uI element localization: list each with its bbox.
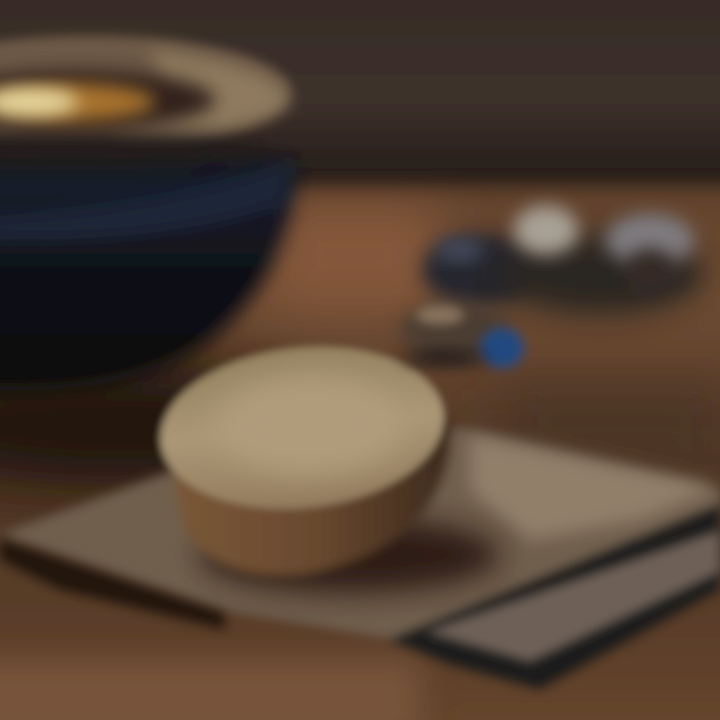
napkin bbox=[0, 428, 720, 640]
bowl body bbox=[0, 130, 296, 391]
bowl shadow on table bbox=[0, 365, 360, 485]
cake shadow bbox=[200, 517, 500, 593]
bowl blue highlight band bbox=[0, 160, 292, 241]
napkin shadow edge bbox=[0, 538, 225, 630]
dark slate mat bbox=[390, 505, 720, 690]
wall background bbox=[0, 0, 720, 185]
wooden table bbox=[0, 170, 720, 720]
round cake bbox=[152, 334, 500, 593]
bowl bbox=[0, 36, 296, 391]
bowl rim bbox=[0, 36, 290, 148]
cake side bbox=[170, 420, 450, 576]
glowing contents bbox=[0, 84, 155, 120]
cake top bbox=[152, 334, 452, 522]
bowl interior bbox=[0, 70, 215, 130]
blue and silver objects bbox=[400, 206, 705, 368]
